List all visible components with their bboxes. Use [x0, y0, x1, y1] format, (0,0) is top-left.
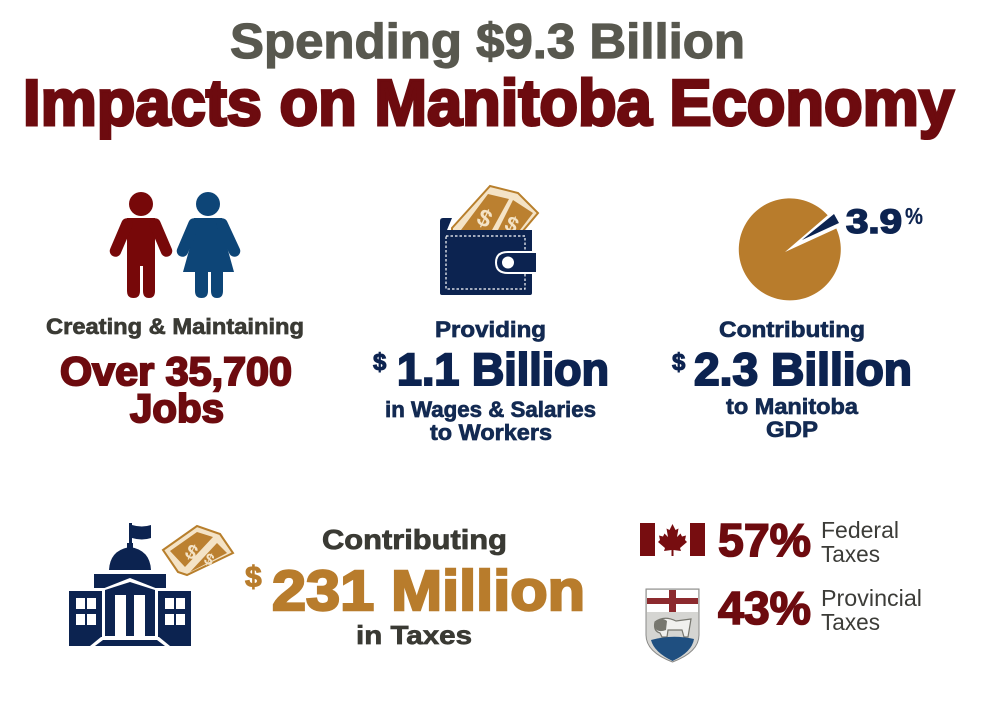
icon: flag: [127, 523, 151, 549]
pie main slice: [739, 198, 841, 300]
stat: 57%: 57%: [718, 514, 811, 566]
text: wages and salaries: in Wages & Salaries: [385, 397, 596, 422]
panel: GDP: [672, 198, 923, 442]
stat: over 35,700 jobs: Jobs: [130, 387, 224, 431]
title: [23, 15, 954, 139]
stat: 43%: 43%: [718, 582, 811, 634]
text: wages and salaries: to Workers: [430, 420, 552, 445]
stat: 2.3 billion: $: [672, 349, 686, 376]
chart: pie 3.9%: [739, 198, 841, 300]
icon: banknotes: $: [501, 211, 523, 238]
text: to Manitoba GDP: to Manitoba: [726, 394, 859, 419]
icon: banknotes: $: [201, 551, 217, 570]
icon: roof: [94, 574, 166, 588]
icon: bison: [655, 618, 691, 637]
text: contributing: Contributing: [719, 317, 865, 342]
panel: wages: [373, 186, 609, 445]
text: wages and salaries: [385, 397, 596, 445]
icon: banknotes: [163, 526, 233, 575]
panel: federal taxes: [640, 514, 899, 567]
panel: jobs: [46, 192, 304, 431]
stat: over 35,700 jobs: Over 35,700: [60, 350, 292, 394]
text: to Manitoba GDP: [726, 394, 859, 442]
icon: centre block: [102, 578, 158, 638]
stat: 231 million: $: [245, 561, 262, 594]
text: to Manitoba GDP: GDP: [766, 417, 818, 442]
stat: 231 million: 231 Million: [272, 559, 585, 623]
stat: 3.9%: %: [905, 203, 923, 229]
panel: taxes: [69, 523, 585, 650]
icon: dome: [109, 547, 151, 570]
icon: man and woman: [116, 192, 234, 298]
text: federal taxes: [821, 517, 899, 567]
text: providing: Providing: [435, 317, 546, 342]
stat: 3.9%: 3.9: [846, 203, 902, 241]
icon: right wing: [158, 591, 191, 646]
text: in taxes: in Taxes: [356, 620, 472, 650]
icon: woman: [182, 192, 234, 298]
title line: impacts: Impacts on Manitoba Economy: [23, 66, 954, 139]
text: federal taxes: Federal: [821, 517, 899, 543]
stat: 3.9%: [846, 203, 923, 241]
pie highlighted slice: [802, 214, 839, 240]
stat: 1.1 billion: $: [373, 349, 387, 376]
icon: left wing: [69, 591, 102, 646]
icon: banknotes: [452, 186, 538, 238]
stat: 1.1 billion: 1.1 Billion: [397, 344, 609, 395]
text: provincial taxes: Taxes: [821, 609, 880, 635]
stat: over 35,700 jobs: [60, 350, 292, 431]
icon: Canadian flag: [640, 523, 705, 556]
icon: Manitoba shield: [646, 589, 699, 662]
icon: banknotes: $: [181, 540, 201, 565]
text: provincial taxes: Provincial: [821, 585, 922, 611]
icon: banknotes: $: [473, 204, 497, 234]
panel: provincial taxes: [646, 582, 922, 662]
text: provincial taxes: [821, 585, 922, 635]
icon: man: [116, 192, 166, 298]
icon: wallet body: [440, 218, 532, 295]
stat: 2.3 billion: 2.3 Billion: [694, 344, 912, 395]
text: federal taxes: Taxes: [821, 541, 880, 567]
text: creating and maintaining: Creating & Maintaining: [46, 314, 304, 339]
text: contributing: Contributing: [322, 524, 507, 555]
icon: government building: [69, 523, 191, 646]
title line: spending: Spending $9.3 Billion: [230, 15, 745, 69]
icon: wallet clasp: [496, 252, 537, 273]
icon: wallet with money: [440, 186, 538, 295]
